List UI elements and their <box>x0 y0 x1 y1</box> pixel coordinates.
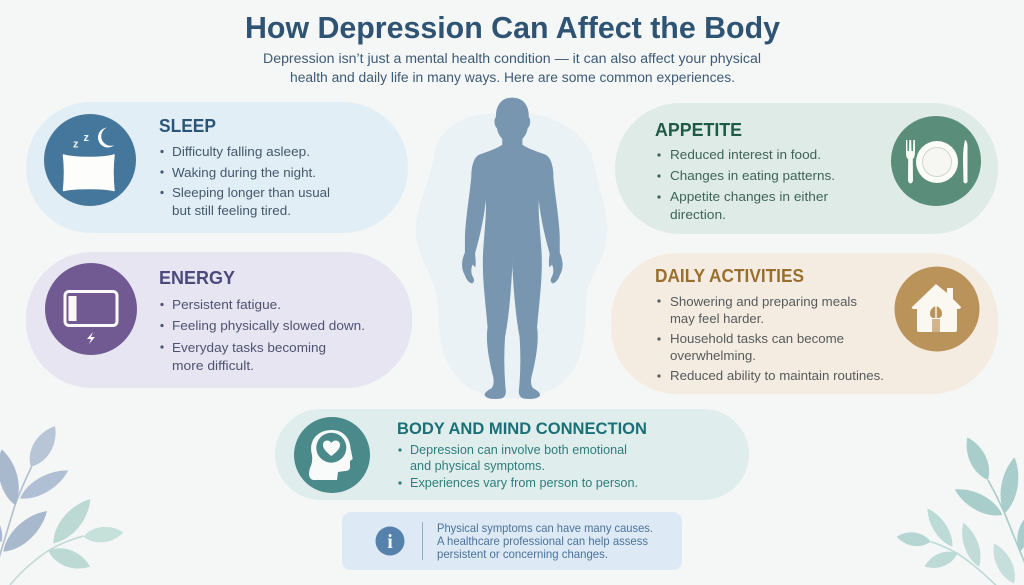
icon: pillow and moon <box>44 114 136 206</box>
icon: plate and cutlery <box>891 116 981 206</box>
icon: head with heart <box>294 417 370 493</box>
list: energy: Everyday tasks becoming <box>172 340 326 355</box>
list: sleep: Difficulty falling asleep. <box>172 144 310 159</box>
icon: info <box>376 526 404 556</box>
subtitle: health and daily life in many ways. Here are some common experiences. <box>290 70 735 86</box>
panel: daily activities <box>611 253 998 394</box>
list: sleep: Sleeping longer than usual <box>172 185 330 200</box>
list: appetite: Appetite changes in either <box>670 189 829 204</box>
icon: info: i <box>387 531 393 553</box>
panel: energy <box>26 252 412 388</box>
callout text <box>437 522 653 561</box>
callout text: A healthcare professional can help assess <box>437 535 648 548</box>
list: sleep <box>160 144 330 218</box>
list: body and mind connection: Experiences vary from person to person. <box>410 475 638 490</box>
center body figure <box>416 98 607 399</box>
heading: energy: ENERGY <box>159 268 235 288</box>
heading: sleep: SLEEP <box>159 116 216 136</box>
list: daily activities <box>657 294 884 383</box>
callout text: Physical symptoms can have many causes. <box>437 522 653 535</box>
list: body and mind connection <box>398 442 638 490</box>
panel: appetite <box>615 103 998 234</box>
list: body and mind connection: and physical symptoms. <box>410 458 545 473</box>
list: energy: Persistent fatigue. <box>172 297 281 312</box>
list: daily activities: may feel harder. <box>670 311 764 326</box>
subtitle <box>263 51 761 86</box>
list: sleep: but still feeling tired. <box>172 203 291 218</box>
heading: appetite: APPETITE <box>655 120 742 140</box>
list: body and mind connection: Depression can involve both emotional <box>410 442 627 457</box>
list: appetite: direction. <box>670 207 726 222</box>
callout text: persistent or concerning changes. <box>437 548 608 561</box>
panel: sleep <box>26 102 408 233</box>
heading: body and mind connection: BODY AND MIND CONNECTION <box>397 419 647 438</box>
callout: healthcare note <box>342 512 682 570</box>
list: energy <box>160 297 365 373</box>
list: daily activities: Showering and preparing meals <box>670 294 857 309</box>
list: appetite: Changes in eating patterns. <box>670 168 835 183</box>
list: energy: more difficult. <box>172 358 254 373</box>
list: appetite <box>657 147 835 222</box>
title: How Depression Can Affect the Body <box>245 10 781 45</box>
list: appetite: Reduced interest in food. <box>670 147 821 162</box>
list: daily activities: Household tasks can become <box>670 331 844 346</box>
list: sleep: Waking during the night. <box>172 165 316 180</box>
icon: low battery <box>45 263 137 355</box>
icon: pillow and moon: z <box>73 138 79 150</box>
icon: house <box>894 266 980 352</box>
icon: pillow and moon: z <box>84 132 90 144</box>
decorative leaves: bottom right <box>896 434 1024 585</box>
panel: body and mind connection <box>275 409 749 500</box>
decorative leaves: bottom left <box>0 421 124 585</box>
subtitle: Depression isn’t just a mental health condition — it can also affect your physical <box>263 51 761 67</box>
list: energy: Feeling physically slowed down. <box>172 318 365 333</box>
list: daily activities: overwhelming. <box>670 348 756 363</box>
list: daily activities: Reduced ability to maintain routines. <box>670 368 884 383</box>
heading: daily activities: DAILY ACTIVITIES <box>655 266 804 286</box>
